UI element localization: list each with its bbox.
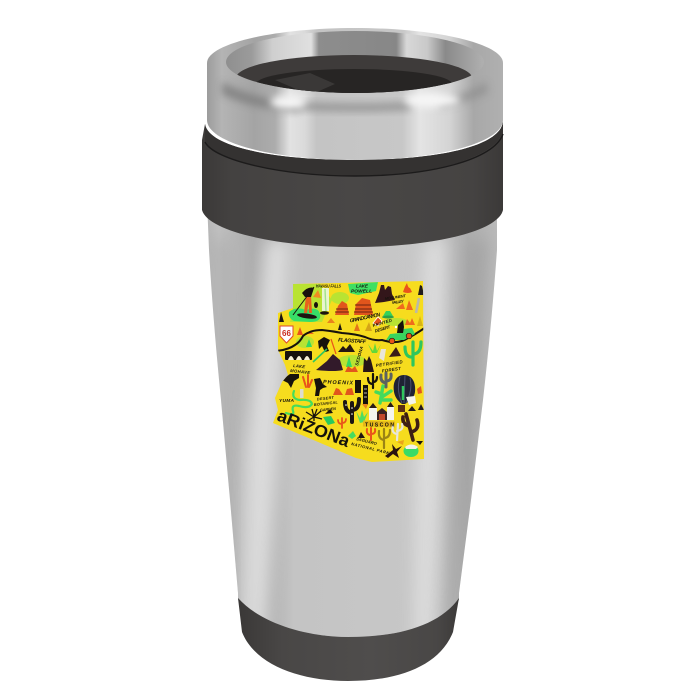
green flowering cactus	[376, 386, 391, 403]
labels: HAVASU FALLS	[316, 284, 342, 288]
labels: VALLEY	[392, 299, 404, 305]
dark mound	[389, 347, 401, 357]
green lake	[289, 308, 320, 322]
black spotted cactus	[345, 399, 359, 422]
hiker	[313, 337, 336, 362]
labels: PHOENIX	[323, 380, 353, 387]
orange cactus south	[367, 428, 375, 440]
lime patches	[290, 284, 408, 367]
labels: POWELL	[351, 288, 372, 294]
labels: FOREST	[382, 366, 401, 373]
black base	[238, 598, 459, 681]
black towers	[355, 380, 368, 405]
labels	[275, 284, 407, 456]
orange sprig	[362, 404, 368, 409]
bridge	[285, 351, 312, 360]
tumbler product illustration	[202, 28, 504, 681]
route 66 sign	[280, 326, 293, 343]
green bush	[404, 444, 418, 457]
orange rocks	[333, 388, 354, 395]
large green cactus	[405, 342, 421, 365]
brown saguaro	[403, 414, 418, 440]
labels: MOHAVE	[290, 368, 311, 375]
small black agave	[325, 409, 333, 414]
small trees	[279, 312, 342, 330]
orange cactus	[338, 418, 346, 428]
white spire	[379, 349, 386, 361]
grey cactus	[381, 373, 391, 387]
labels: PETRIFIED	[375, 359, 404, 368]
green small plants	[306, 339, 352, 367]
green snake	[286, 391, 312, 414]
hot air balloon	[394, 375, 422, 412]
black mound south	[358, 432, 365, 438]
tucson plaque	[363, 420, 395, 428]
small white totem	[300, 389, 304, 398]
black bottle	[418, 285, 424, 295]
black palm	[306, 409, 322, 421]
labels: LAKE	[356, 284, 369, 288]
orange pines	[354, 322, 372, 331]
green small bush	[348, 431, 356, 439]
black tiny hat	[416, 441, 423, 445]
labels: MONUMENT	[385, 294, 407, 301]
steel lid collar	[207, 28, 503, 160]
grey outlined cactus	[392, 424, 402, 440]
labels: NATIONAL PARK	[351, 441, 391, 456]
labels: BOTANICAL	[314, 400, 339, 407]
red flames	[403, 283, 412, 293]
black cactus	[368, 374, 377, 388]
orange tree	[297, 327, 314, 335]
green hat	[382, 311, 394, 318]
orange sails	[396, 298, 419, 313]
orange plant	[303, 375, 312, 387]
eagle	[282, 374, 299, 388]
olive saguaro	[379, 429, 390, 448]
labels: SEDONA	[354, 346, 364, 366]
labels: GARDEN	[320, 407, 336, 412]
yellow plant	[417, 316, 423, 326]
dark mountain	[316, 354, 343, 371]
labels: TUSCON	[365, 422, 394, 428]
small black mounds east	[408, 404, 424, 411]
green lizard	[323, 416, 335, 425]
labels: DESERT	[374, 324, 391, 333]
labels: DESERT	[317, 396, 335, 401]
orange butte group	[345, 356, 374, 372]
black grip band	[202, 122, 503, 247]
green car	[386, 320, 415, 344]
Arizona map decal	[273, 281, 426, 462]
labels: LAKE	[293, 363, 306, 369]
labels: YUMA	[279, 398, 295, 404]
black star cactus	[385, 444, 402, 458]
orange agave	[405, 318, 415, 325]
red canyon rocks	[335, 298, 373, 315]
steel body	[207, 200, 497, 640]
green lake Powell band	[348, 282, 378, 295]
labels: aRiZONa	[275, 406, 353, 451]
waterfall	[320, 288, 329, 315]
striped stack	[373, 317, 382, 326]
lid opening	[226, 31, 472, 93]
green agave	[356, 410, 368, 423]
monument valley buttes	[375, 285, 395, 303]
black mound flagstaff	[338, 344, 355, 352]
runner	[314, 378, 327, 396]
orange bird	[397, 440, 404, 445]
labels: SAGUARO	[356, 436, 378, 446]
route 66 sign: 66	[282, 329, 291, 338]
san xavier mission	[369, 402, 394, 420]
labels: GRAND CANYON	[349, 312, 381, 324]
labels: PAINTED	[372, 318, 393, 328]
paddle boarder	[293, 287, 321, 320]
green agave	[368, 343, 381, 353]
labels: FLAGSTAFF	[338, 338, 367, 345]
route line	[276, 327, 426, 351]
